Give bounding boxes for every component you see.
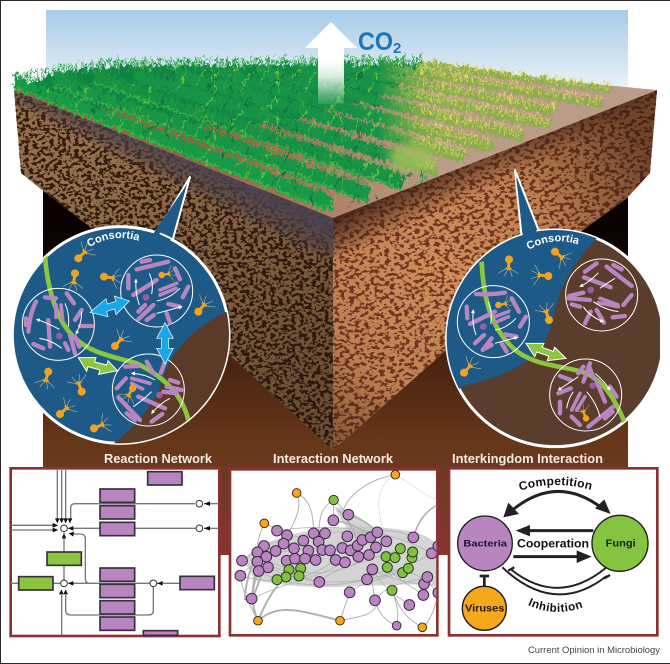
free phages (454, 241, 575, 382)
node: viruses (462, 586, 506, 630)
panel: interkingdom interaction (448, 467, 659, 637)
cooperation label: Cooperation (517, 537, 589, 550)
consortia label: Consortia (87, 231, 139, 246)
arrowheads (53, 501, 210, 594)
free phages (34, 239, 217, 439)
reaction lines (11, 468, 219, 635)
heading: Reaction Network: Reaction Network (104, 452, 212, 466)
soil patch (114, 312, 229, 444)
node: bacteria: Bacteria (463, 539, 508, 549)
plant root (45, 255, 188, 420)
virus inhibition bar (480, 576, 489, 587)
inhibition arcs (502, 567, 610, 594)
consortium D (457, 286, 529, 358)
consortium C (112, 354, 184, 426)
competition label: Competition (519, 476, 592, 490)
arrow: blue A to B (90, 296, 129, 317)
soil block: left face (10, 85, 340, 455)
arrow: green A to C (78, 358, 117, 374)
heading: Interkingdom Interaction: Interkingdom Interaction (452, 452, 603, 466)
callout tail (157, 177, 190, 240)
pale grass patch (390, 144, 434, 172)
callout tail (515, 170, 539, 237)
green nodes (272, 495, 418, 595)
consortium B (121, 255, 193, 327)
field surface (14, 68, 657, 218)
sky (46, 10, 628, 95)
green reaction boxes (19, 552, 81, 590)
panel: right consortia magnifier (445, 169, 660, 448)
competition arrow (503, 491, 611, 517)
cooperation arrow to fungi (513, 550, 592, 563)
circle background (12, 227, 229, 443)
purple reaction boxes (100, 472, 214, 635)
node: bacteria (458, 516, 512, 571)
node: fungi (592, 515, 648, 571)
consortium F (550, 359, 622, 431)
orange nodes (254, 470, 427, 632)
grass rows (14, 60, 612, 213)
arrow: CO2 release (305, 22, 357, 104)
soil block: right face (330, 85, 660, 455)
consortium E (566, 259, 638, 331)
purple nodes (235, 509, 444, 630)
arrow: blue B to C (157, 323, 173, 364)
CO2 subscript: 2 (393, 40, 401, 57)
water region (446, 230, 597, 389)
panel: reaction network (11, 468, 219, 636)
consortium A (22, 288, 94, 360)
panel: left consortia magnifier (14, 176, 230, 445)
plant root (482, 262, 625, 423)
heading: Interaction Network: Interaction Network (273, 452, 393, 466)
consortia label: Consortia (526, 234, 578, 249)
cooperation arrow to bacteria (516, 525, 593, 536)
credit line: Current Opinion in Microbiology (528, 645, 660, 656)
arrow: green D to F (526, 343, 566, 361)
node: viruses: Viruses (465, 604, 504, 615)
circle background (447, 230, 663, 447)
node: fungi: Fungi (606, 539, 636, 550)
network edges (240, 475, 438, 627)
metabolite nodes (61, 500, 203, 587)
CO2 label: CO (358, 28, 393, 56)
inhibition label: Inhibition (528, 598, 582, 612)
dark background gradient (43, 190, 628, 555)
panel: interaction network (230, 469, 444, 635)
